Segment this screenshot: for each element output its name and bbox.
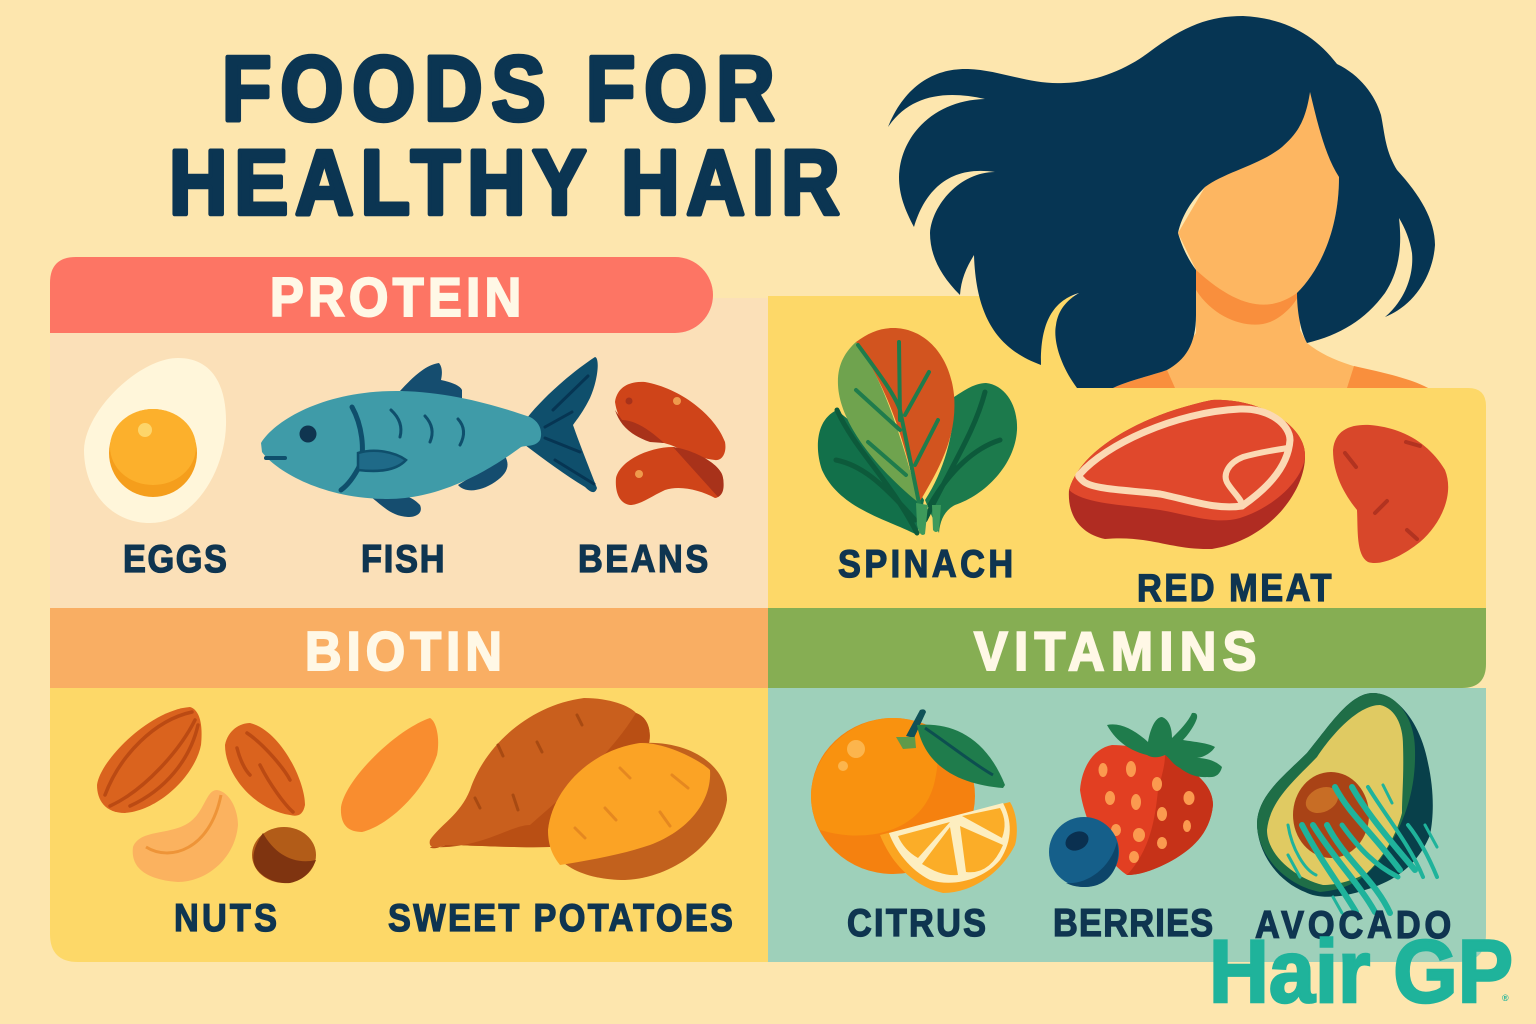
illustration: woman with flowing hair — [888, 16, 1435, 388]
title: HEALTHY HAIR — [169, 132, 840, 234]
icon: avocado — [1257, 693, 1437, 913]
panel background: vitamins — [768, 688, 1486, 962]
icon: egg — [84, 358, 226, 523]
logo: Hair GP: ® — [1502, 993, 1509, 1003]
icon: nuts — [97, 707, 316, 883]
panel background: biotin — [50, 688, 768, 962]
title — [169, 38, 840, 234]
label: nuts: NUTS — [174, 896, 277, 939]
label: sweet potatoes: SWEET POTATOES — [388, 896, 733, 939]
icon: spinach — [818, 328, 1017, 535]
heading: protein: PROTEIN — [270, 267, 521, 328]
heading bar: biotin — [50, 608, 768, 688]
heading: vitamins: VITAMINS — [974, 621, 1256, 682]
icon: beans — [615, 382, 725, 505]
heading bar: vitamins — [768, 608, 1486, 688]
panel: iron — [768, 296, 1486, 609]
title: FOODS FOR — [222, 38, 775, 140]
logo: Hair GP: Hair GP — [1209, 921, 1513, 1021]
icon: sweet potatoes — [341, 698, 727, 880]
icon: fish — [261, 357, 598, 517]
heading: biotin: BIOTIN — [305, 621, 502, 682]
panel background: iron — [768, 296, 1486, 608]
panel: protein — [50, 257, 768, 608]
label: fish: FISH — [361, 537, 445, 580]
label: red meat: RED MEAT — [1137, 566, 1332, 609]
panel: vitamins — [768, 608, 1486, 962]
panel background: protein — [50, 298, 768, 608]
icon: citrus — [811, 709, 1017, 893]
icon: red meat steak — [1069, 400, 1448, 563]
label: citrus: CITRUS — [847, 901, 986, 944]
label: berries: BERRIES — [1053, 901, 1213, 944]
panel: biotin — [50, 608, 768, 962]
label: spinach: SPINACH — [838, 542, 1013, 585]
label: eggs: EGGS — [123, 537, 227, 580]
icon: strawberry — [1080, 713, 1222, 875]
label: avocado: AVOCADO — [1255, 903, 1451, 946]
heading bar: protein — [50, 257, 713, 333]
icon: blueberry — [1049, 817, 1119, 887]
label: beans: BEANS — [578, 537, 708, 580]
